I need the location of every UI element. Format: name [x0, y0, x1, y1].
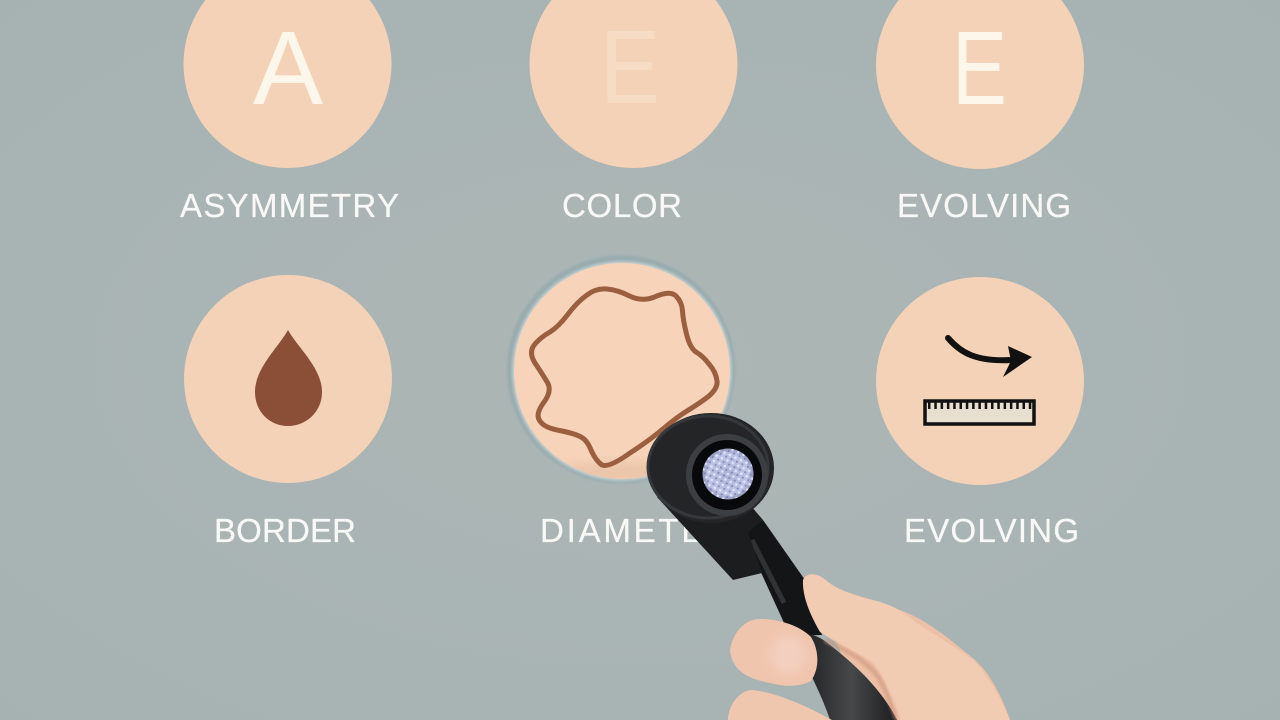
device: grip: [795, 634, 897, 720]
label: color: COLOR: [562, 187, 682, 224]
infographic canvas: [180, 0, 1084, 720]
device: neck: [657, 470, 763, 580]
circle with faint letter E: E: [600, 9, 660, 126]
circle with faint letter E: [530, 0, 738, 168]
circle with letter E: [876, 0, 1084, 169]
item: evolving top: [876, 0, 1084, 224]
hand holding dermatoscope: [648, 413, 1010, 720]
label: asymmetry: ASYMMETRY: [180, 187, 399, 224]
device: thin handle: [743, 520, 822, 636]
hand: fingernail: [770, 635, 806, 675]
circle with letter A: A: [253, 10, 323, 127]
label: border: BORDER: [214, 512, 356, 549]
label: evolving: EVOLVING: [904, 512, 1079, 549]
item: asymmetry: [180, 0, 399, 224]
hand: lower finger: [728, 690, 832, 720]
circle with letter A: [184, 0, 392, 168]
device: head: [648, 413, 774, 523]
circle with drop: [184, 275, 392, 483]
item: diameter: [507, 256, 735, 549]
circle with letter E: E: [952, 10, 1007, 127]
icon: brown drop: [255, 330, 322, 426]
device: illuminated sensor: [702, 448, 754, 500]
icon: curved arrow: [948, 338, 1032, 377]
icon: ruler: [925, 401, 1034, 424]
device: lens ring: [686, 434, 768, 516]
item: color: [530, 0, 738, 224]
dermatoscope: [648, 413, 897, 720]
item: evolving bottom: [876, 277, 1084, 549]
item: border: [184, 275, 392, 549]
magnified circle: [507, 256, 735, 484]
hand: thumb: [803, 574, 1010, 720]
circle with arrow and ruler: [876, 277, 1084, 485]
label: diameter: DIAMETER: [540, 512, 730, 549]
label: evolving: EVOLVING: [897, 187, 1071, 224]
irregular mole outline: [532, 289, 717, 466]
hand: index finger: [730, 619, 817, 686]
hand: back and thumb base: [808, 590, 1010, 720]
